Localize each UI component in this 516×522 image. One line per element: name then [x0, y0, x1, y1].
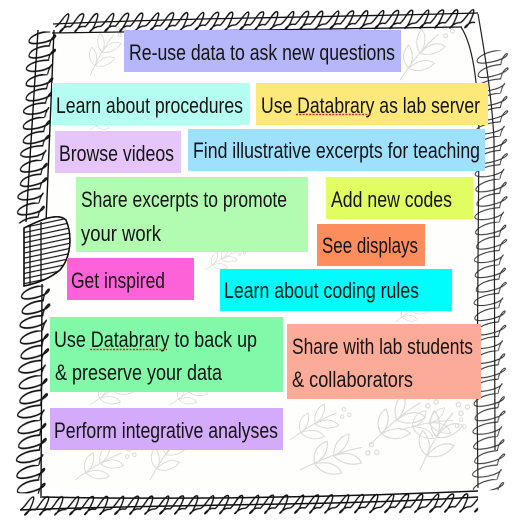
note: browse videos: Browse videos: [59, 141, 174, 166]
note: learn about procedures: [52, 83, 250, 125]
tab hatching: [24, 217, 70, 286]
frame: top edge: [52, 8, 478, 34]
note: see displays: [317, 224, 425, 266]
note: add new codes: [326, 177, 473, 219]
note: share with lab students: [287, 324, 481, 399]
note: back up and preserve data: [50, 317, 283, 392]
note: back up and preserve data: & preserve your data: [55, 360, 223, 385]
frame: bottom edge: [20, 491, 478, 517]
note: perform integrative analyses: Perform integrative analyses: [54, 418, 278, 443]
note: re-use data: Re-use data to ask new questions: [129, 40, 395, 65]
note: find illustrative excerpts: [188, 129, 485, 171]
frame: left edge lower: [14, 285, 52, 494]
frame: left edge lines: [26, 30, 54, 498]
note: use Databrary as lab server: [256, 83, 488, 125]
note: learn about procedures: Learn about procedures: [56, 93, 243, 118]
note: share excerpts: [76, 177, 308, 252]
note: learn about coding rules: [220, 269, 452, 311]
background paper: [42, 32, 479, 490]
tab on left edge: [24, 217, 70, 286]
background floral pattern: [74, 19, 485, 483]
frame: right edge lines: [461, 14, 495, 488]
note: add new codes: Add new codes: [331, 187, 452, 212]
note: share with lab students: & collaborators: [292, 367, 413, 392]
note: back up and preserve data: Use Databrary to back up: [54, 327, 257, 352]
note: re-use data: [124, 30, 401, 72]
note: learn about coding rules: Learn about coding rules: [224, 278, 419, 303]
note: share excerpts: Share excerpts to promote: [81, 187, 287, 212]
note: get inspired: Get inspired: [71, 268, 165, 293]
frame: left edge upper: [14, 30, 58, 225]
note: browse videos: [55, 131, 181, 173]
note: see displays: See displays: [322, 233, 418, 258]
note: perform integrative analyses: [50, 408, 283, 450]
note: share excerpts: your work: [81, 221, 162, 246]
frame: right edge: [470, 50, 510, 490]
note: get inspired: [67, 258, 194, 300]
note: share with lab students: Share with lab students: [292, 334, 473, 359]
